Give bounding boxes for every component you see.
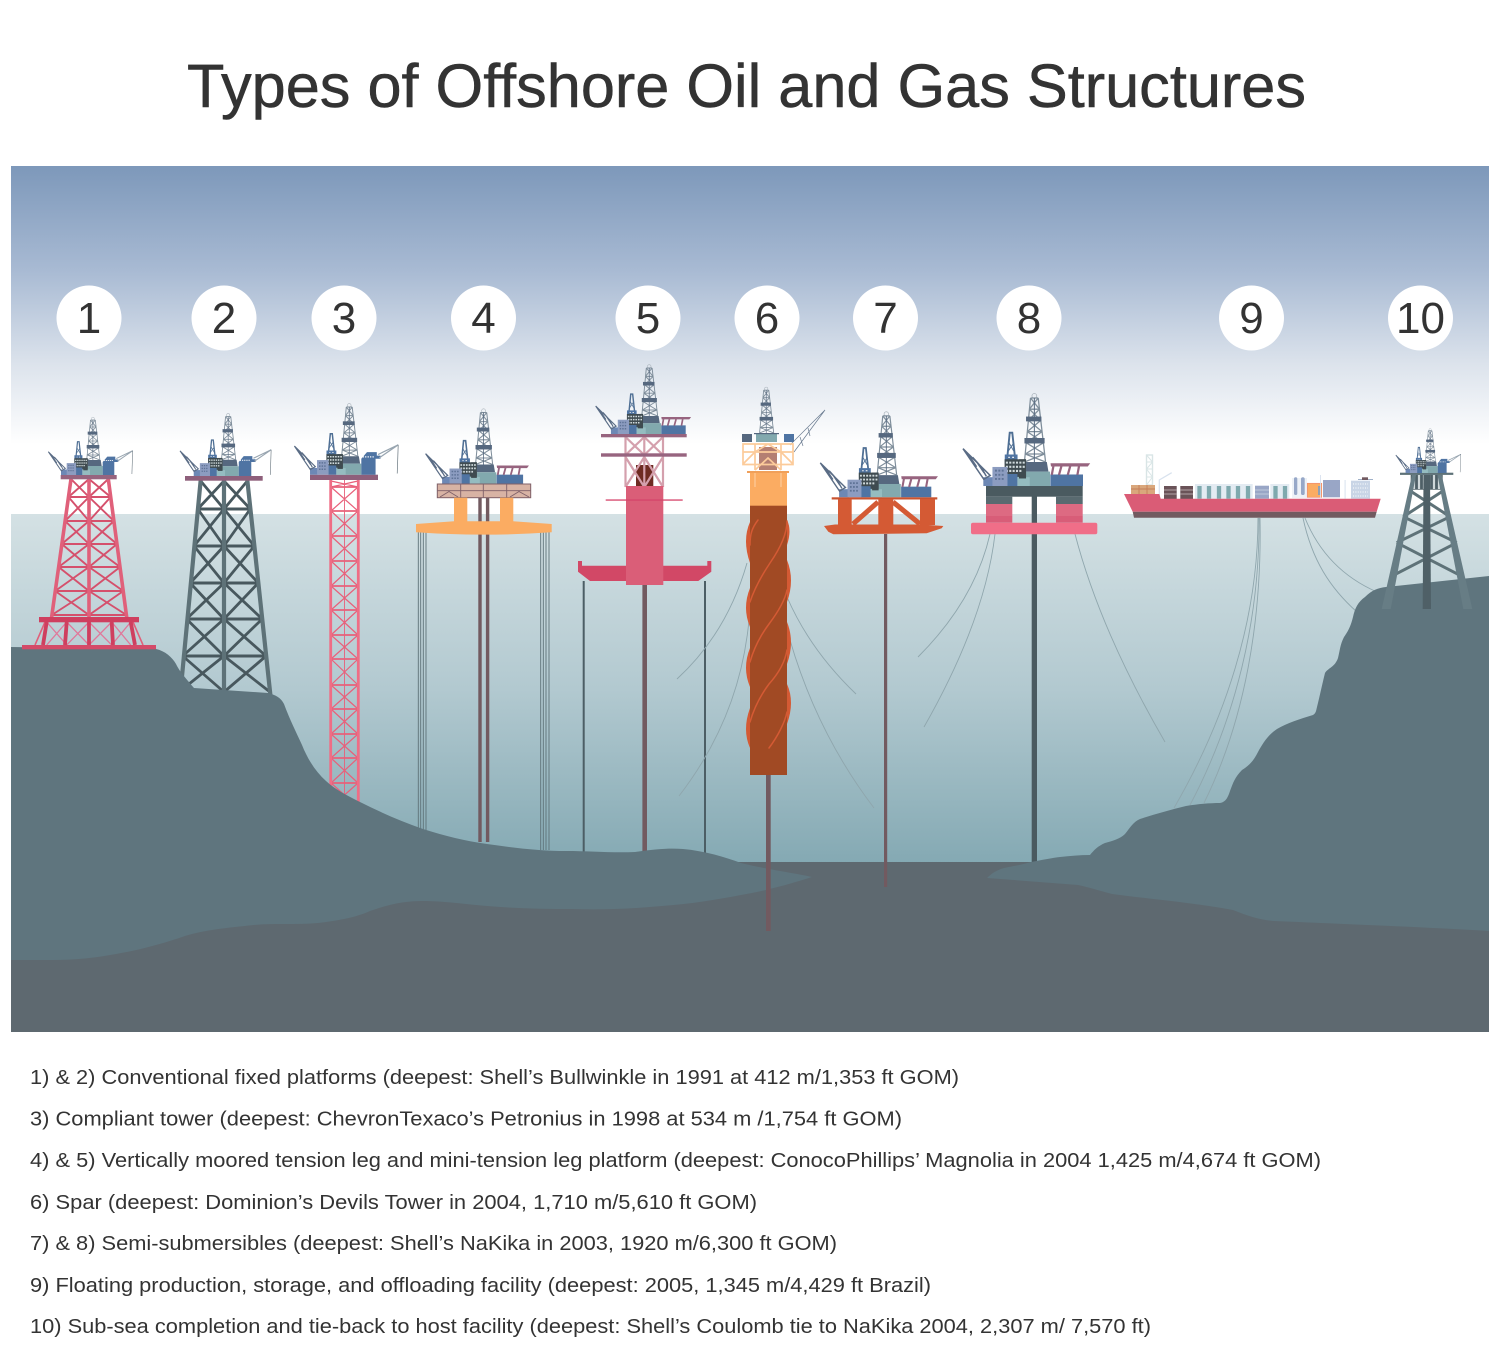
- number badge 8: [996, 286, 1062, 350]
- structure 6: spar: [742, 387, 825, 931]
- caption 7 and 8: 7) & 8) Semi-submersibles (deepest: Shell’s NaKika in 2003, 1920 m/6,300 ft GOM): [30, 1232, 837, 1255]
- number badge 2: 2: [212, 294, 236, 343]
- caption 3: 3) Compliant tower (deepest: ChevronTexaco’s Petronius in 1998 at 534 m /1,754 ft GOM): [30, 1108, 902, 1130]
- number badge 7: [853, 286, 918, 350]
- number badge 4: 4: [471, 294, 496, 343]
- structure 1 topside: [48, 417, 133, 479]
- number badge 3: 3: [332, 294, 356, 343]
- topside 10: [1396, 428, 1461, 473]
- number badge 1: 1: [77, 294, 101, 343]
- number badge 10: 10: [1396, 294, 1445, 343]
- structure 7: semi-submersible: [820, 412, 943, 887]
- structure 4 tendons and pipes: [418, 497, 549, 850]
- structure 5: mini tension leg platform: [578, 365, 711, 585]
- caption 6: 6) Spar (deepest: Dominion’s Devils Tower in 2004, 1,710 m/5,610 ft GOM): [30, 1191, 757, 1214]
- helical strakes: [750, 520, 787, 748]
- number badge 5: [616, 286, 680, 350]
- structure 1: fixed platform on seabed: [22, 479, 156, 649]
- number badge 1: [56, 286, 122, 350]
- structure 5 tendons and pipe: [584, 581, 705, 856]
- caption 1 and 2: 1) & 2) Conventional fixed platforms (deepest: Shell’s Bullwinkle in 1991 at 412 m/1,353 ft GOM): [30, 1066, 959, 1089]
- structure 10: sub-sea tie-back tower: [1382, 428, 1472, 609]
- caption 10: 10) Sub-sea completion and tie-back to host facility (deepest: Shell’s Coulomb tie to NaKika 2004, 2,307 m/ 7,570 ft): [30, 1315, 1151, 1338]
- deep seabed: [11, 862, 1489, 1032]
- mooring lines for spar and semi-submersible: [677, 534, 1165, 808]
- structure 8: semi-submersible: [963, 394, 1097, 534]
- number badge 10: [1388, 286, 1453, 350]
- structure 2 topside: [180, 414, 271, 481]
- number badge 3: [312, 286, 376, 350]
- sky background: [11, 166, 1489, 514]
- number badge 7: 7: [873, 294, 898, 343]
- left continental slope: [11, 647, 812, 960]
- number badge 6: [734, 286, 800, 350]
- number badge 4: [451, 286, 516, 350]
- structure 2: fixed platform jacket: [179, 480, 270, 696]
- number badge 9: [1219, 286, 1284, 350]
- number badge 6: 6: [755, 294, 779, 343]
- structure 9: FPSO ship: [1124, 455, 1381, 518]
- structure 3: compliant tower: [331, 480, 358, 810]
- caption 4 and 5: 4) & 5) Vertically moored tension leg and mini-tension leg platform (deepest: ConocoPhillips’ Magnolia in 2004 1,425 m/4,674 ft GOM): [30, 1149, 1321, 1172]
- sea water: [11, 514, 1489, 864]
- title: Types of Offshore Oil and Gas Structures: [187, 52, 1306, 120]
- right continental slope: [987, 576, 1489, 931]
- structure 3 topside: [294, 404, 398, 480]
- structure 4: tension leg platform: [416, 409, 552, 535]
- number badge 8: 8: [1017, 294, 1041, 343]
- structure 8 central riser: [1032, 496, 1037, 864]
- ship deck equipment: [1131, 455, 1373, 499]
- number badge 9: 9: [1239, 294, 1264, 343]
- FPSO risers: [1174, 518, 1377, 808]
- caption list: [30, 1066, 1321, 1338]
- number badge 2: [192, 286, 256, 350]
- caption 9: 9) Floating production, storage, and offloading facility (deepest: 2005, 1,345 m/4,429 ft Brazil): [30, 1274, 931, 1297]
- number badge 5: 5: [636, 294, 660, 343]
